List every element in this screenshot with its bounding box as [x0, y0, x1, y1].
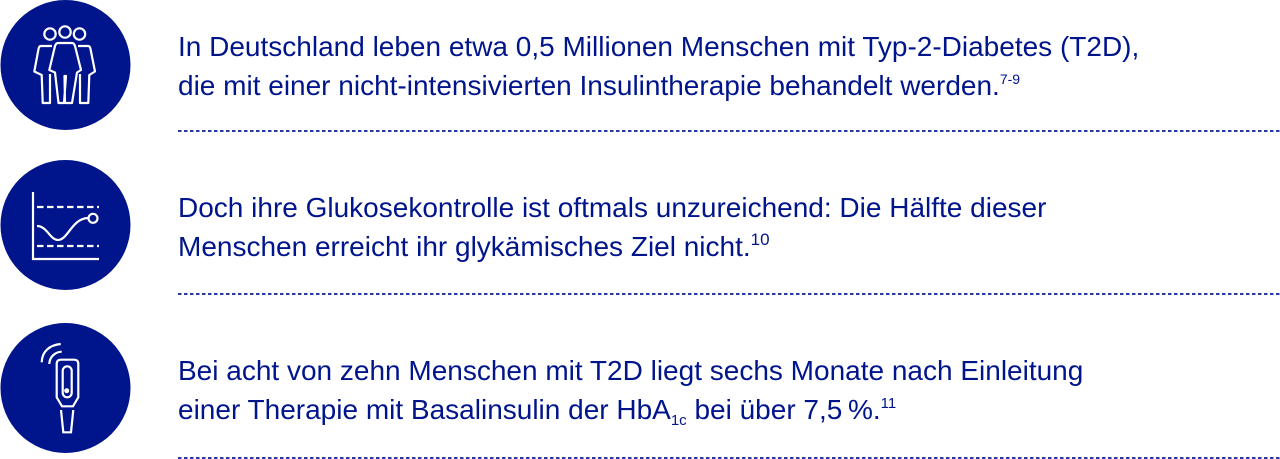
divider	[178, 293, 1280, 295]
text: first statement: die mit einer nicht-intensivierten Insulintherapie behandelt werden.7-9	[178, 70, 1020, 100]
text: third statement: Bei acht von zehn Menschen mit T2D liegt sechs Monate nach Einleitung	[178, 355, 1083, 386]
divider	[178, 130, 1280, 132]
icon: group of people	[0, 0, 130, 130]
text: second statement: Doch ihre Glukosekontrolle ist oftmals unzureichend: Die Hälfte dieser	[178, 192, 1046, 223]
text: first statement	[178, 31, 1139, 101]
text: third statement	[178, 355, 1083, 428]
text: second statement	[178, 192, 1046, 262]
text: second statement: Menschen erreicht ihr glykämisches Ziel nicht.10	[178, 230, 770, 262]
text: third statement: einer Therapie mit Basalinsulin der HbA1c bei über 7,5 %.11	[178, 394, 896, 428]
divider	[178, 457, 1280, 459]
icon: glucose sensor device	[0, 323, 130, 453]
icon: glucose chart	[0, 160, 130, 290]
text: first statement: In Deutschland leben etwa 0,5 Millionen Menschen mit Typ-2-Diabetes (T2D),	[178, 31, 1139, 62]
